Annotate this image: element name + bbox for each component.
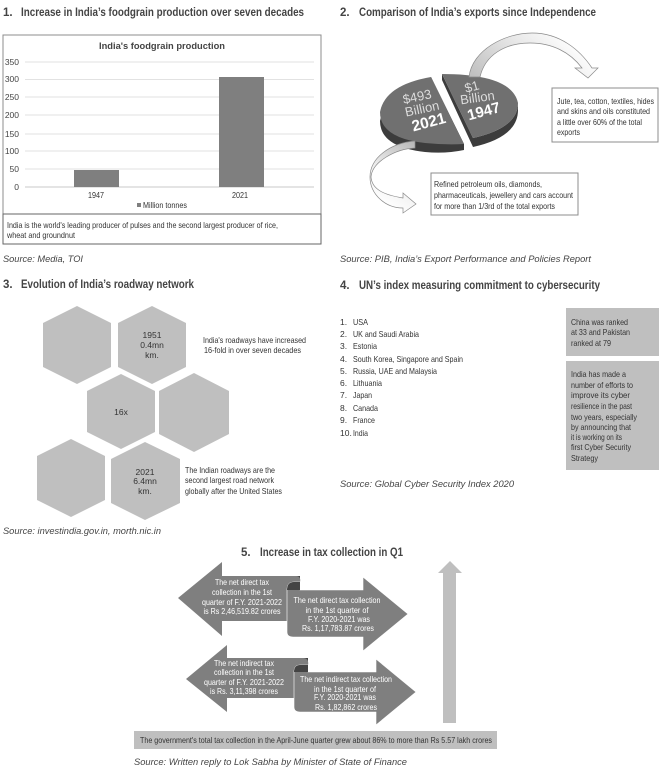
panel 2: exports [340,7,658,264]
callout: 2021 exports: pharmaceuticals, jewellery and cars account [434,190,574,200]
callout: India efforts: two years, especially [571,412,638,422]
arrow: net indirect tax 2021-22: The net indirect tax [214,658,275,668]
hexagon label: 1951: 1951 [143,330,162,340]
hexagon label: 2021: 6.4mn [133,476,157,486]
bar chart: India's foodgrain production [99,41,225,52]
bar chart: 1947 [88,190,104,200]
bar chart: 50 [10,164,19,174]
chart frame [3,35,321,244]
ranking list: 1. [340,317,347,327]
summary bar: The government's total tax collection in the April-June quarter grew about 86% to more than Rs 5.57 lakh crores [140,735,492,745]
ranking list: 7. [340,390,347,400]
callout: India efforts: by announcing that [571,422,632,432]
callout: India efforts: India has made a [571,369,626,379]
ranking list: UK and Saudi Arabia [353,329,419,339]
note: 16-fold [203,335,306,355]
source 4: Source: Global Cyber Security Index 2020 [340,479,514,489]
callout: 2021 exports [431,173,578,215]
ranking list: South Korea, Singapore and Spain [353,354,463,364]
caption box [3,214,321,244]
ranking list: Japan [353,390,372,400]
ranking list: 10. [340,428,352,438]
callout: India efforts: Strategy [571,453,599,463]
arrow: net direct tax 2020-21: Rs. 1,17,783.87 crores [302,623,374,633]
split pie: 2021 [410,110,448,135]
split pie: Billion [404,98,441,120]
split pie: 1947 [466,99,502,124]
bar chart [5,41,314,210]
callout: 1947 exports [552,88,658,142]
callout: China and Pakistan [566,308,659,356]
ranking list: 5. [340,366,347,376]
ranking list: 6. [340,378,347,388]
arrow: net direct tax 2020-21: The net direct tax collection [294,595,381,605]
arrow: net indirect tax 2020-21: Rs. 1,82,862 crores [315,702,377,712]
callout: India efforts: first Cyber Security [571,442,632,452]
ranking list: Russia, UAE and Malaysia [353,366,437,376]
hexagon label: 2021 [133,467,157,496]
arrow: net indirect tax 2021-22 [186,645,308,712]
hexagon label: 2021: km. [138,486,152,496]
heading 2: Comparison of India’s exports since Independence [359,7,596,19]
arrow: net indirect tax 2020-21: in the 1st quarter of [314,684,377,694]
arrow: net direct tax 2020-21: F.Y. 2020-2021 was [308,614,370,624]
callout: India efforts: resilience in the past [571,401,632,411]
bar chart: 250 [5,92,19,102]
caption box: India is the world's leading producer of pulses and the second largest producer of rice, [7,220,278,230]
hexagon label: 2021: 2021 [136,467,155,477]
arrow: net indirect tax 2021-22: is Rs. 3,11,398 crores [210,686,278,696]
callout: China and Pakistan: at 33 and Pakistan [571,327,630,337]
callout: China and Pakistan: China was ranked [571,317,628,327]
heading 3: Evolution of India’s roadway network [21,279,195,291]
caption box: wheat and groundnut [6,230,76,240]
ranking list: 9. [340,415,347,425]
bar chart: 150 [5,129,19,139]
split pie: Billion [459,88,496,107]
ranking list: 8. [340,403,347,413]
arrow: net indirect tax 2021-22: quarter of F.Y. 2021-2022 [204,677,284,687]
arrow: 1947 callout [469,33,598,78]
ranking list: Lithuania [353,378,382,388]
bar chart: 350 [5,57,19,67]
callout: 2021 exports: for more than 1/3rd of the total exports [434,201,555,211]
heading 1: 1. [3,7,13,19]
bar chart: Million tonnes [143,200,187,210]
ranking list: 3. [340,341,347,351]
callout: India efforts: it is working on its [571,432,622,442]
bar chart: 300 [5,74,19,84]
split pie: $493 [401,86,433,107]
heading 1: Increase in India’s foodgrain production over seven decades [21,7,304,19]
source 3: Source: investindia.gov.in, morth.nic.in [3,526,161,536]
source 2: Source: PIB, India’s Export Performance and Policies Report [340,254,592,264]
note: second largest: globally after the United States [185,486,282,496]
ranking list: France [353,415,375,425]
note: second largest: The Indian roadways are the [185,465,275,475]
hexagon label: 1951: km. [145,350,159,360]
heading 4: 4. [340,280,350,292]
bar chart: 0 [14,182,19,192]
panel 3: roadways [3,279,306,536]
split pie [380,74,518,153]
source 1: Source: Media, TOI [3,254,84,264]
arrow: 2021 callout [370,141,416,213]
arrow: net direct tax 2021-22: quarter of F.Y. 2021-2022 [202,597,282,607]
arrow: net direct tax 2020-21 [287,576,408,651]
panel 1: foodgrain production [3,7,321,264]
ranking list [340,317,463,438]
note: second largest [185,465,282,496]
ranking list: 2. [340,329,347,339]
heading 3: 3. [3,279,13,291]
arrow: net indirect tax 2020-21: F.Y. 2020-2021 was [314,692,376,702]
heading 4: UN’s index measuring commitment to cybersecurity [359,280,601,292]
callout: 1947 exports: exports [557,127,580,137]
bar chart: 2021 [232,190,248,200]
arrow: net direct tax 2021-22 [178,562,300,636]
ranking list: Canada [353,403,378,413]
heading 2: 2. [340,7,350,19]
ranking list: USA [353,317,368,327]
heading 5: 5. [241,547,251,559]
callout: India efforts: improve its cyber [571,390,630,400]
note: 16-fold: India's roadways have increased [203,335,306,345]
callout: 2021 exports: Refined petroleum oils, diamonds, [434,179,542,189]
arrow: net direct tax 2021-22: The net direct tax [215,577,270,587]
heading 5: Increase in tax collection in Q1 [260,547,404,559]
hexagon label: 1951 [140,330,164,360]
arrow: net indirect tax 2021-22: collection in the 1st [214,667,275,677]
arrow: upward growth [438,561,462,723]
arrow: net direct tax 2021-22: collection in the 1st [212,587,273,597]
callout: China and Pakistan: ranked at 79 [571,338,611,348]
callout: India efforts: number of efforts to [571,380,633,390]
arrow: net indirect tax 2020-21: The net indirect tax collection [300,674,392,684]
arrow: net direct tax 2020-21: in the 1st quarter of [306,605,369,615]
hexagon label: 1951: 0.4mn [140,340,164,350]
callout: 1947 exports: a little over 60% of the total [557,117,642,127]
hexagons [37,306,229,520]
summary bar [134,731,497,749]
hexagon label: 16x: 16x [114,407,129,417]
panel 5: tax collection [134,547,497,767]
note: second largest: second largest road network [185,475,275,485]
bar chart: 200 [5,110,19,120]
note: 16-fold: 16-fold in over seven decades [204,345,301,355]
split pie: $1 [463,78,481,96]
source 5: Source: Written reply to Lok Sabha by Minister of State of Finance [134,757,407,767]
panel 4: cybersecurity [340,280,659,489]
ranking list: 4. [340,354,347,364]
ranking list: India [353,428,368,438]
callout: India efforts [566,361,659,470]
arrow: net indirect tax 2020-21 [294,658,416,725]
arrow: net direct tax 2021-22: is Rs 2,46,519.82 crores [204,606,280,616]
bar chart: 100 [5,146,19,156]
ranking list: Estonia [353,341,377,351]
